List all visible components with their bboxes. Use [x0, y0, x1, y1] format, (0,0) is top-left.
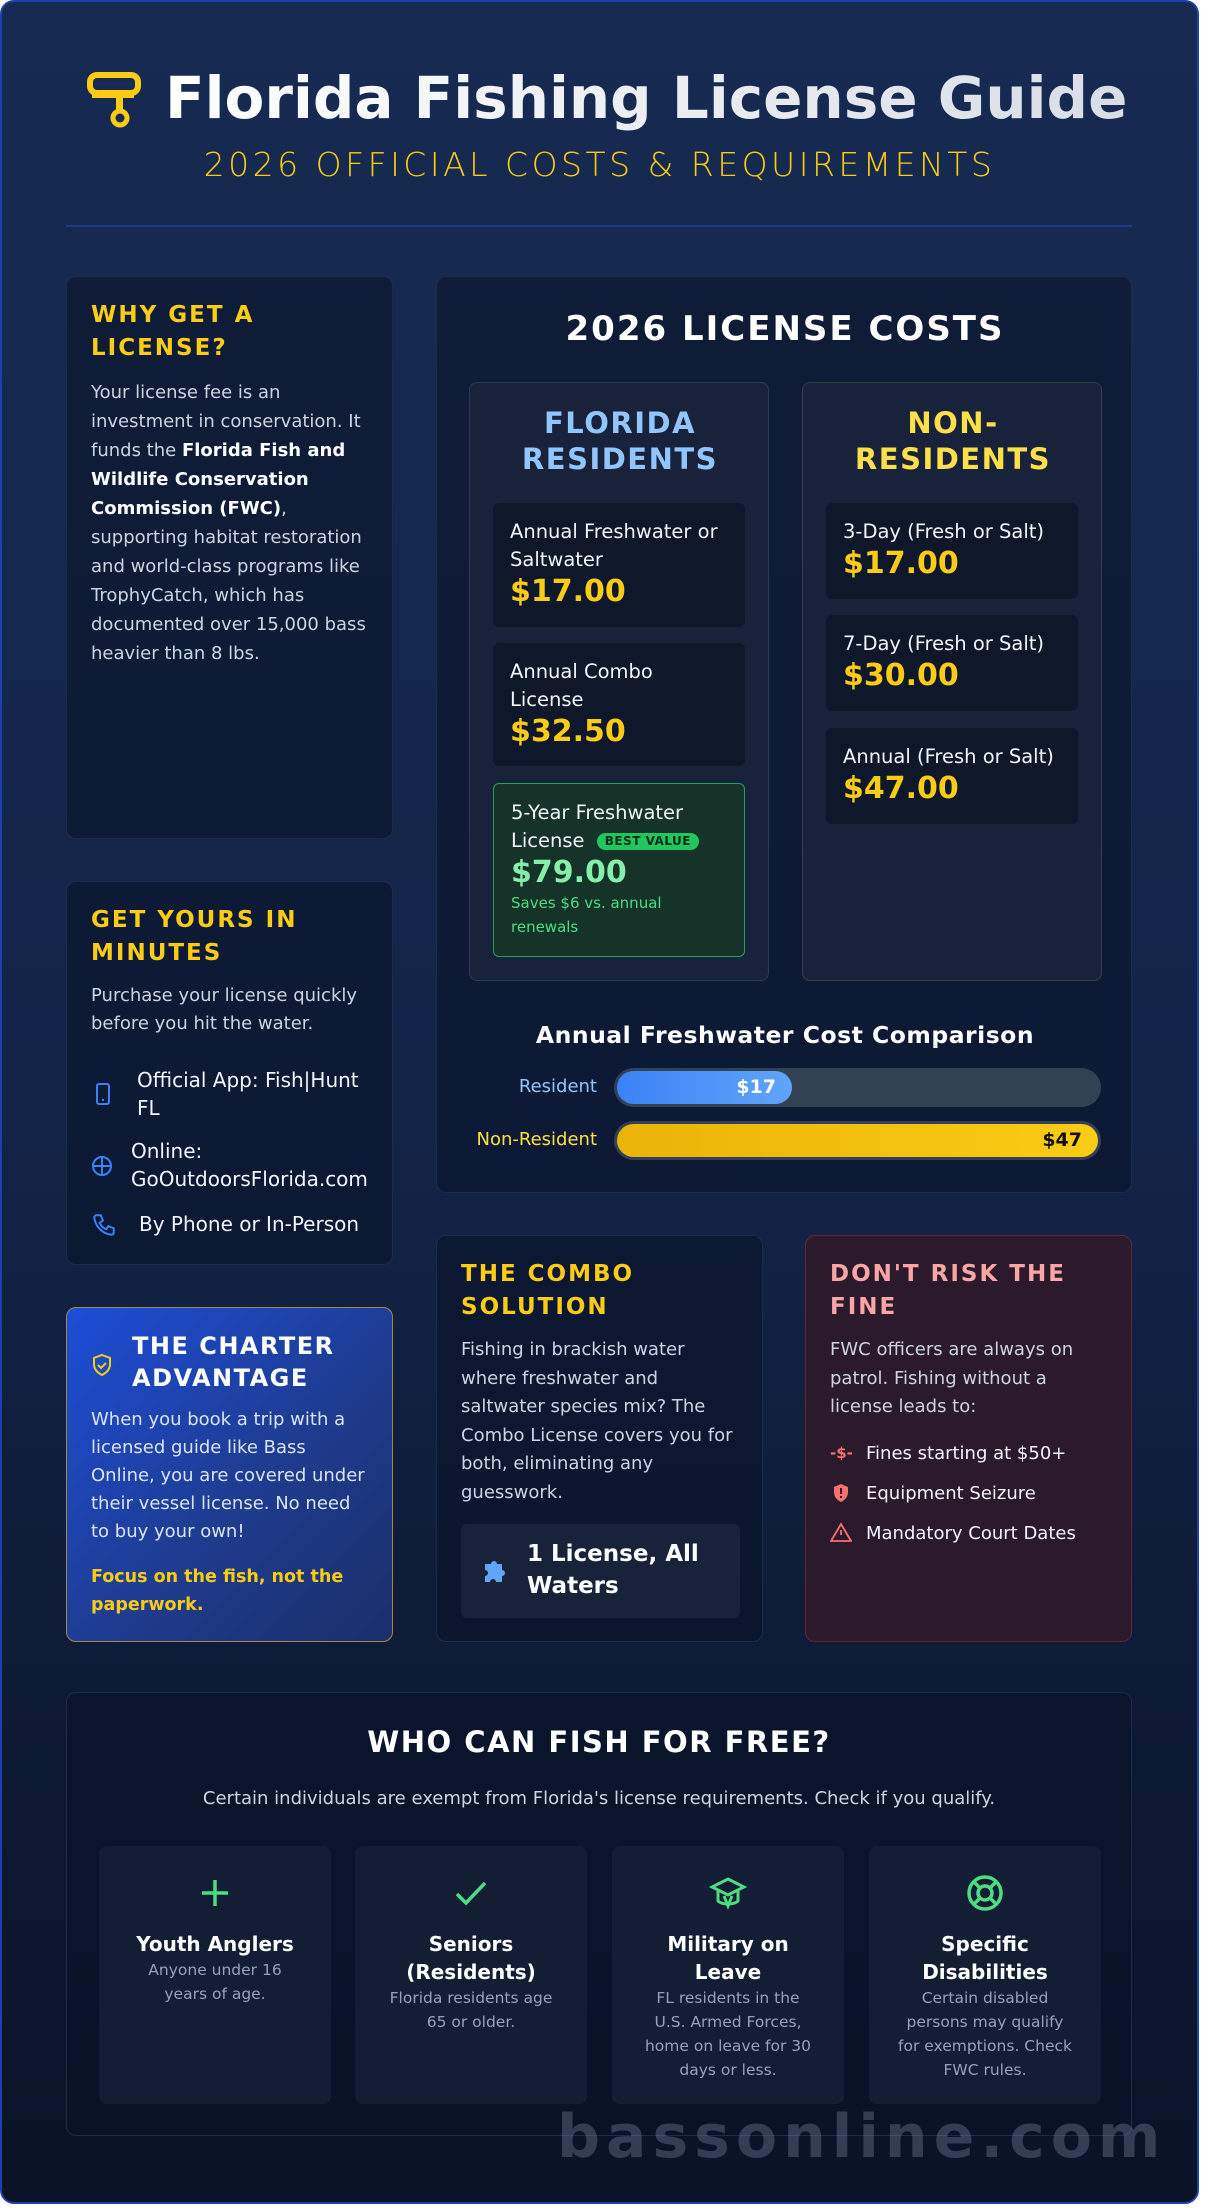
item: 5-year: License	[511, 829, 585, 852]
title: Florida Fishing License Guide	[165, 64, 1127, 132]
text: free intro: Certain individuals are exempt from Florida's license requirements. Check if you qualify.	[203, 1788, 995, 1809]
card: seniors	[355, 1846, 587, 2104]
item: annual nonres: Annual (Fresh or Salt)	[843, 745, 1054, 768]
list: consequences: Fines starting at $50+	[866, 1443, 1066, 1464]
heading: why: WHY GET A LICENSE?	[91, 302, 254, 361]
bar chart: $47	[1042, 1129, 1082, 1151]
card: disabilities: for exemptions. Check	[898, 2037, 1072, 2055]
column: non-residents	[802, 382, 1102, 981]
panel: why get a license	[66, 276, 393, 839]
text: charter: to buy your own!	[91, 1521, 245, 1542]
text: fine: FWC officers are always on	[830, 1339, 1073, 1360]
heading: non-residents: RESIDENTS	[855, 442, 1051, 476]
card: seniors: Seniors	[429, 1932, 513, 1956]
card: youth	[99, 1846, 331, 2104]
item: 5-year: $79.00	[511, 855, 627, 890]
card: disabilities	[869, 1846, 1101, 2104]
card: youth: Anyone under 16	[148, 1961, 282, 1979]
card: seniors: (Residents)	[406, 1960, 536, 1984]
bar chart: Non-Resident	[476, 1129, 597, 1150]
text: charter: When you book a trip with a	[91, 1409, 345, 1430]
text: combo: Fishing in brackish water	[461, 1339, 684, 1360]
item: app	[96, 1068, 359, 1120]
heading: non-residents	[855, 406, 1051, 476]
item: 5-year: BEST VALUE	[605, 834, 691, 848]
card: disabilities: Specific	[941, 1932, 1029, 1956]
panel: don't risk the fine	[805, 1235, 1132, 1642]
list: consequences: Equipment Seizure	[866, 1483, 1036, 1504]
item: 5-year: Saves $6 vs. annual renewals	[511, 894, 662, 936]
text: charter: licensed guide like Bass	[91, 1437, 306, 1458]
heading: fine: DON'T RISK THE FINE	[830, 1261, 1066, 1320]
card: military: U.S. Armed Forces,	[654, 2013, 802, 2031]
item: combo: License	[510, 688, 584, 711]
text: focus: Focus on the fish, not the paperwork.	[91, 1567, 343, 1615]
icon: shield	[93, 1354, 111, 1376]
heading: charter: THE CHARTER	[132, 1332, 335, 1360]
heading: non-residents: NON-	[907, 406, 999, 440]
watermark: bassonline.com	[557, 2102, 1166, 2172]
heading: charter: ADVANTAGE	[132, 1364, 309, 1392]
item: annual nonres: $47.00	[843, 771, 959, 806]
bar chart: $17	[736, 1076, 776, 1098]
list: consequences: -$-	[830, 1444, 853, 1462]
card: military: Military on	[667, 1932, 789, 1956]
text: fine: patrol. Fishing without a	[830, 1368, 1047, 1388]
bar chart	[476, 1021, 1101, 1160]
card: disabilities: Certain disabled	[922, 1989, 1048, 2007]
item: combo: Annual Combo	[510, 660, 653, 683]
list: consequences: Mandatory Court Dates	[866, 1523, 1076, 1544]
callout: 1 license	[461, 1524, 740, 1618]
item: combo: $32.50	[510, 714, 626, 749]
panel: who can fish for free	[66, 1692, 1132, 2136]
card: youth: years of age.	[164, 1985, 266, 2003]
item: 7-day	[826, 615, 1078, 711]
text: why: Your license fee is an investment in conservation. It funds the Florida Fish and Wildlife Conservation Commission (FWC), supporting habitat restoration and world-class programs like TrophyCatch, which has documented over 15,000 bass heavier than 8 lbs.	[91, 382, 366, 664]
item: app: FL	[137, 1096, 160, 1120]
text: combo: where freshwater and saltwater species mix? The Combo License covers you for both, eliminating any guesswork.	[461, 1368, 733, 1502]
bar chart: Resident	[519, 1076, 597, 1097]
item: 3-day: $17.00	[843, 546, 959, 581]
heading: get yours: GET YOURS IN MINUTES	[91, 907, 297, 966]
heading: residents: RESIDENTS	[522, 442, 718, 476]
text: charter	[91, 1409, 365, 1542]
heading: combo: THE COMBO SOLUTION	[461, 1261, 634, 1320]
card: military: days or less.	[679, 2061, 777, 2079]
item: 7-day: $30.00	[843, 658, 959, 693]
text: fine	[830, 1339, 1073, 1417]
item: online: Online:	[131, 1139, 202, 1163]
item: annual	[493, 503, 745, 627]
text: charter: Online, you are covered under	[91, 1465, 365, 1486]
panel: combo solution	[436, 1235, 763, 1642]
item: 5-year: 5-Year Freshwater	[511, 801, 683, 824]
heading: free: WHO CAN FISH FOR FREE?	[367, 1725, 831, 1759]
card: military: home on leave for 30	[645, 2037, 811, 2055]
card: military: Leave	[695, 1960, 761, 1984]
panel: charter advantage	[66, 1307, 393, 1642]
chart title: Annual Freshwater Cost Comparison	[536, 1021, 1034, 1049]
subtitle: 2026 OFFICIAL COSTS & REQUIREMENTS	[204, 145, 995, 184]
card: disabilities: FWC rules.	[943, 2061, 1027, 2079]
heading: residents	[522, 406, 718, 476]
heading: residents: FLORIDA	[544, 406, 696, 440]
list: consequences	[830, 1443, 1076, 1544]
text: get yours: Purchase your license quickly before you hit the water.	[91, 985, 357, 1034]
item: phone: By Phone or In-Person	[139, 1212, 359, 1236]
card: youth: Youth Anglers	[136, 1932, 294, 1956]
item: app: Official App: Fish|Hunt	[137, 1068, 359, 1092]
item: annual: $17.00	[510, 574, 626, 609]
text: charter: their vessel license. No need	[91, 1493, 350, 1514]
card: military	[612, 1846, 844, 2104]
panel: get yours	[66, 881, 393, 1265]
card: disabilities: Disabilities	[922, 1960, 1048, 1984]
card: military: FL residents in the	[656, 1989, 800, 2007]
item: online	[92, 1139, 368, 1191]
panel: license costs	[436, 276, 1132, 1193]
item: annual nonres	[826, 728, 1078, 824]
icon: license	[87, 72, 141, 128]
column: residents	[469, 382, 769, 981]
card: seniors: Florida residents age	[390, 1989, 552, 2007]
callout: 1 license: 1 License, All	[527, 1541, 699, 1567]
item: 5-year	[493, 783, 745, 957]
item: combo	[493, 643, 745, 766]
item: 3-day: 3-Day (Fresh or Salt)	[843, 520, 1044, 543]
item: annual: Annual Freshwater or Saltwater	[510, 520, 718, 571]
card: seniors: 65 or older.	[427, 2013, 515, 2031]
callout: 1 license: Waters	[527, 1573, 619, 1599]
text: fine: license leads to:	[830, 1396, 976, 1417]
heading: costs: 2026 LICENSE COSTS	[566, 309, 1004, 349]
item: online: GoOutdoorsFlorida.com	[131, 1167, 368, 1191]
item: 3-day	[826, 503, 1078, 599]
card: disabilities: persons may qualify	[907, 2013, 1063, 2031]
heading: charter	[132, 1332, 335, 1392]
item: 7-day: 7-Day (Fresh or Salt)	[843, 632, 1044, 655]
